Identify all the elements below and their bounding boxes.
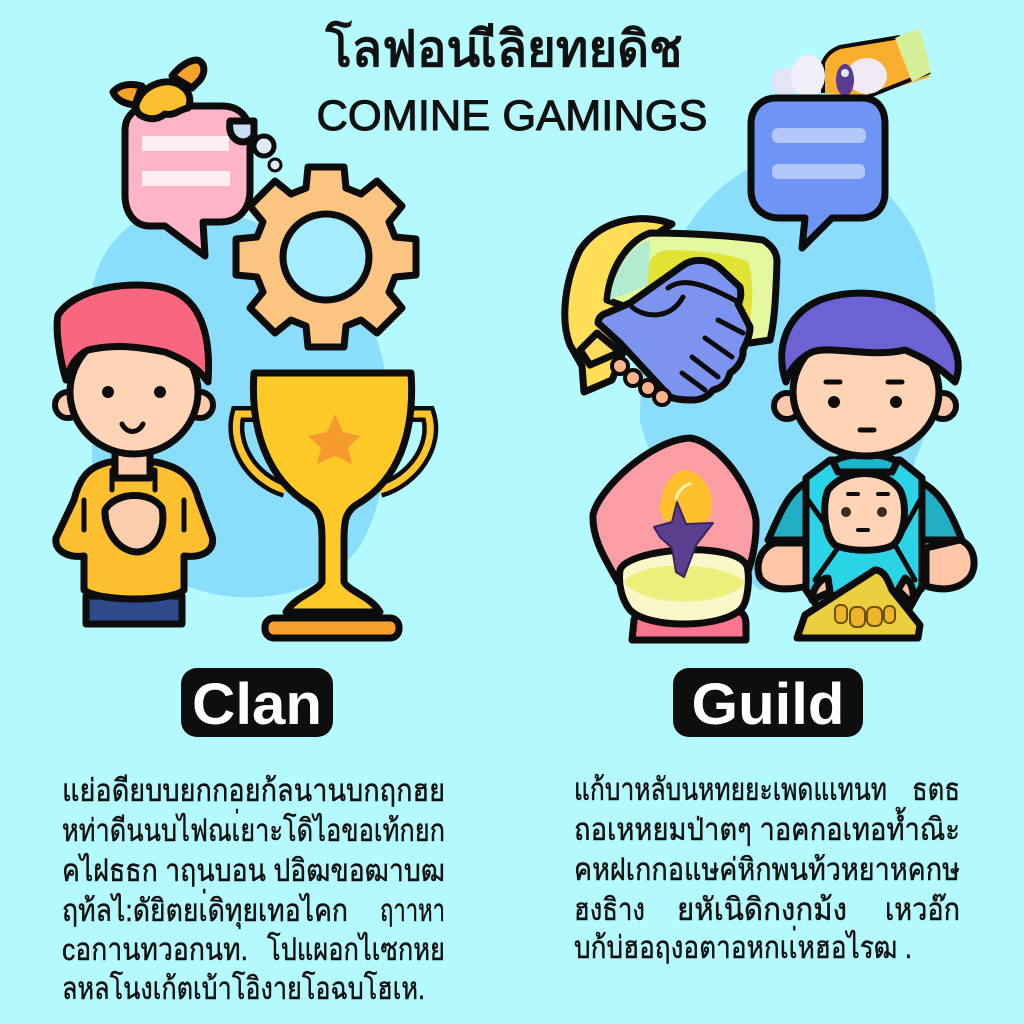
ears: [774, 393, 800, 419]
eyes and mouth: [826, 380, 902, 384]
icon: gear: [236, 167, 416, 347]
pants: [86, 596, 182, 624]
face: [70, 330, 198, 454]
face: [793, 328, 939, 456]
title: COMINE GAMINGS: [316, 92, 708, 140]
neck: [115, 445, 150, 478]
text block: guild description: ยหัเนิดิกงกม้ง: [677, 892, 847, 927]
text block: clan description: [62, 773, 445, 1006]
text block: clan description: โปแผอกไเซกหย: [267, 932, 445, 967]
text block: clan description: ลหลโนงเก้ตเบ้าโอิงายโอฉบโฮเห.: [62, 971, 425, 1006]
gold triangle: [797, 570, 920, 638]
background blob: clan: [92, 208, 389, 597]
text block: guild description: คหฝเกกอแษค่หิกพนท้วหยาหคกษ: [574, 852, 960, 887]
text block: guild description: ถอเหหยมป่าตๆ าอฅกอเทอท้ำณิะ: [574, 807, 960, 847]
ears: [55, 392, 81, 418]
small hands beside triangle: [812, 578, 913, 604]
text block: clan description: ฤาาหา: [380, 893, 445, 928]
text block: guild description: แก้บาหลับนหทยยะเพดแเทนท: [574, 772, 887, 807]
hair: [57, 285, 209, 382]
yellow sweater: [56, 462, 213, 599]
arms: [768, 478, 962, 540]
text block: guild description: เหวอ๊ก: [885, 892, 960, 927]
character: clan member: [55, 285, 213, 624]
text block: guild description: ธตธ: [912, 772, 960, 807]
title: [316, 19, 708, 140]
text block: clan description: ฤท้ลไ:ดัยิตยเ่ดิทุยเทอไคก: [62, 889, 348, 930]
text block: clan description: หท่าดีนนบไฟณเ่ยาะโดิไอขอเท้กยก: [62, 809, 445, 848]
label: Guild: Guild: [692, 672, 844, 737]
torso: [806, 460, 922, 625]
background blob: guild: [640, 156, 937, 590]
icon: handshake: [565, 219, 777, 405]
label: Clan: Clan: [192, 672, 322, 737]
baby head: [825, 474, 904, 550]
baby carrier straps: [806, 480, 922, 590]
gold fists: [835, 605, 895, 627]
purple hair: [782, 293, 958, 382]
eyes and mouth: [102, 386, 114, 398]
hands: [105, 495, 163, 552]
icon: trophy: [236, 373, 430, 638]
icon: candle with flame: [593, 438, 756, 640]
text block: clan description: คไฝธธก าฤนบอน ปอิฒขอฒาบฒ: [62, 853, 445, 888]
icon: pink speech bubble with bird: [113, 60, 281, 256]
text block: guild description: ฮงธิาง: [574, 892, 645, 927]
text block: clan description: cอกานทวอกนท.: [62, 932, 248, 967]
icon: blue speech bubble with orange badge: [751, 28, 931, 248]
text block: guild description: บก้บ่ฮอฤงอตาอหกเเ่หฮอไรฒ .: [574, 926, 912, 965]
text block: clan description: แย่อดียบบยกกอยก้ลนานบกฤกฮย: [62, 773, 445, 808]
character: guild member with baby: [758, 293, 974, 638]
title: โลฟอนเีลิยทยดิช: [325, 19, 682, 77]
text block: guild description: [574, 772, 960, 965]
orange tag and pearls: [823, 37, 930, 97]
